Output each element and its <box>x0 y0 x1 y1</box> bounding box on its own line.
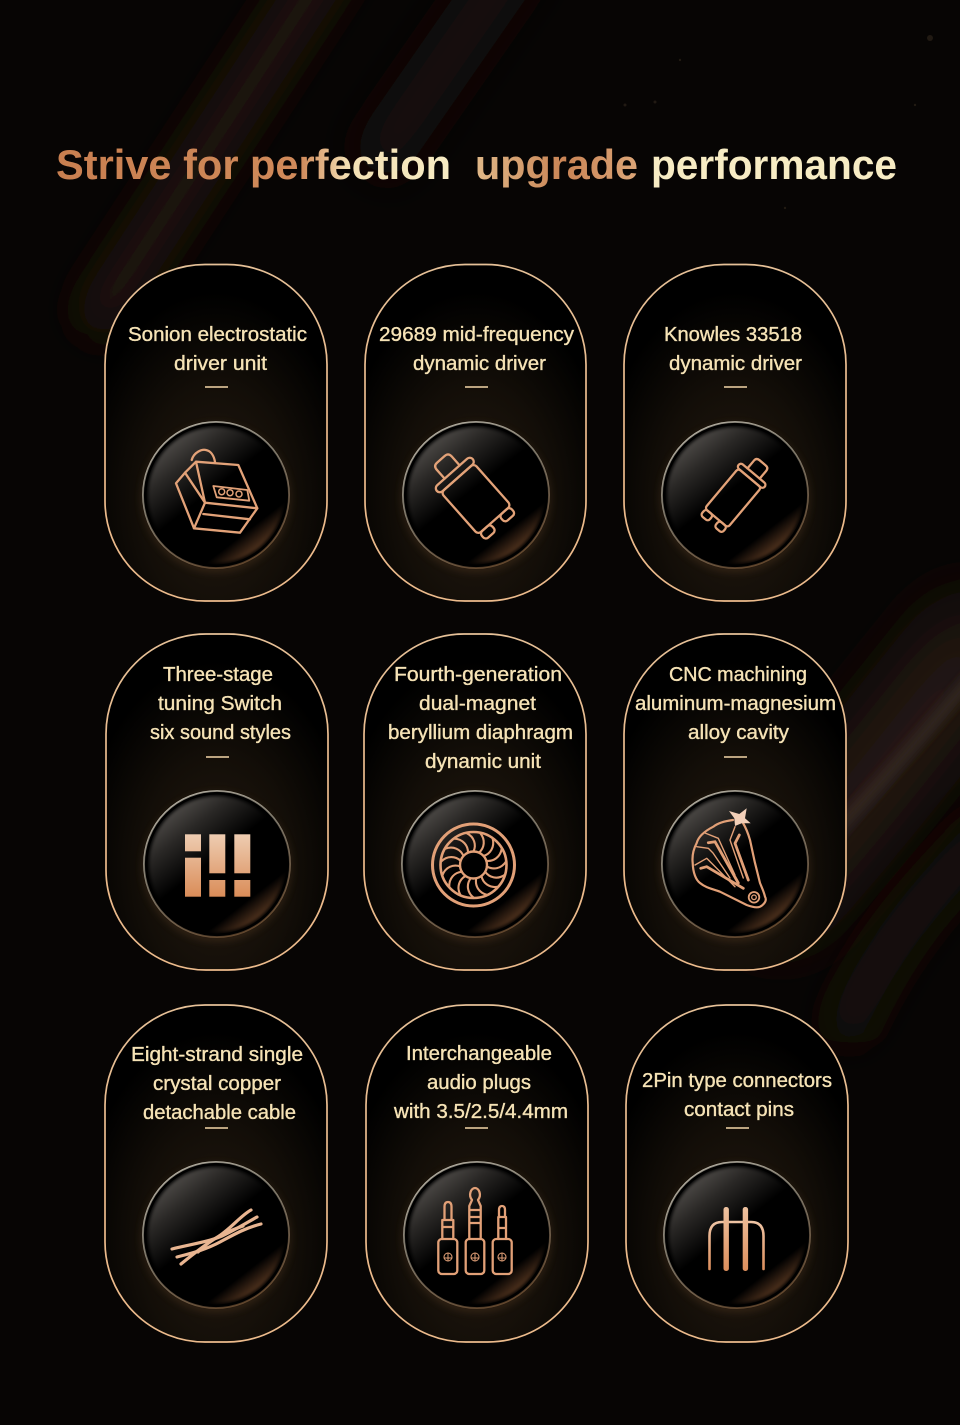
icon: three audio plugs <box>438 1188 512 1274</box>
label: aluminum-magnesium <box>635 693 836 715</box>
icon: alloy cavity with star <box>692 808 766 907</box>
label: contact pins <box>684 1099 794 1121</box>
title: Strive for perfection <box>56 141 451 188</box>
label <box>131 1044 303 1124</box>
panel: interchangeable audio plugs <box>366 1005 588 1342</box>
icon: 2pin contacts <box>710 1207 764 1271</box>
label: 29689 mid-frequency <box>379 324 574 346</box>
title <box>56 141 897 188</box>
panel: Sonion electrostatic driver unit <box>105 264 327 601</box>
label <box>664 324 802 375</box>
label: CNC machining <box>669 664 807 686</box>
icon: electrostatic driver box <box>176 450 257 533</box>
label: Fourth-generation <box>394 664 562 686</box>
label: crystal copper <box>153 1073 281 1095</box>
label <box>150 664 291 744</box>
label: Interchangeable <box>406 1043 552 1065</box>
panel: beryllium diaphragm dynamic unit <box>364 634 586 970</box>
label: audio plugs <box>427 1072 531 1094</box>
label <box>635 664 836 744</box>
label: dynamic driver <box>413 353 546 375</box>
panel: three-stage tuning switch <box>106 634 328 970</box>
title: upgrade <box>475 141 638 188</box>
label: dynamic driver <box>669 353 802 375</box>
panel: eight-strand copper cable <box>105 1005 327 1342</box>
label: dual-magnet <box>419 693 536 715</box>
label: with 3.5/2.5/4.4mm <box>393 1101 568 1123</box>
label: detachable cable <box>143 1102 296 1124</box>
icon: twisted cable <box>172 1210 261 1264</box>
label: tuning Switch <box>158 693 282 715</box>
label: 2Pin type connectors <box>642 1070 832 1092</box>
label <box>388 664 573 773</box>
icon: diaphragm <box>432 824 514 906</box>
icon part: star <box>729 808 751 826</box>
label: beryllium diaphragm <box>388 722 573 744</box>
label: dynamic unit <box>425 751 541 773</box>
label: alloy cavity <box>688 722 789 744</box>
label: Eight-strand single <box>131 1044 303 1066</box>
label: Three-stage <box>163 664 273 686</box>
panel: CNC aluminum-magnesium cavity <box>624 634 846 970</box>
label <box>642 1070 832 1121</box>
icon: Knowles dynamic driver <box>698 452 776 535</box>
panel: Knowles 33518 dynamic driver <box>624 264 846 601</box>
panel: 29689 mid-frequency dynamic driver <box>365 264 586 601</box>
icon: mid-frequency driver <box>423 443 518 543</box>
label: Sonion electrostatic <box>128 324 307 346</box>
icon: tuning switch bars <box>185 834 250 897</box>
label: six sound styles <box>150 722 291 744</box>
label: Knowles 33518 <box>664 324 802 346</box>
panel: 2Pin connectors <box>626 1005 848 1342</box>
label <box>379 324 574 375</box>
label <box>128 324 307 375</box>
label: driver unit <box>174 353 267 375</box>
title: performance <box>651 141 897 188</box>
label <box>393 1043 568 1123</box>
